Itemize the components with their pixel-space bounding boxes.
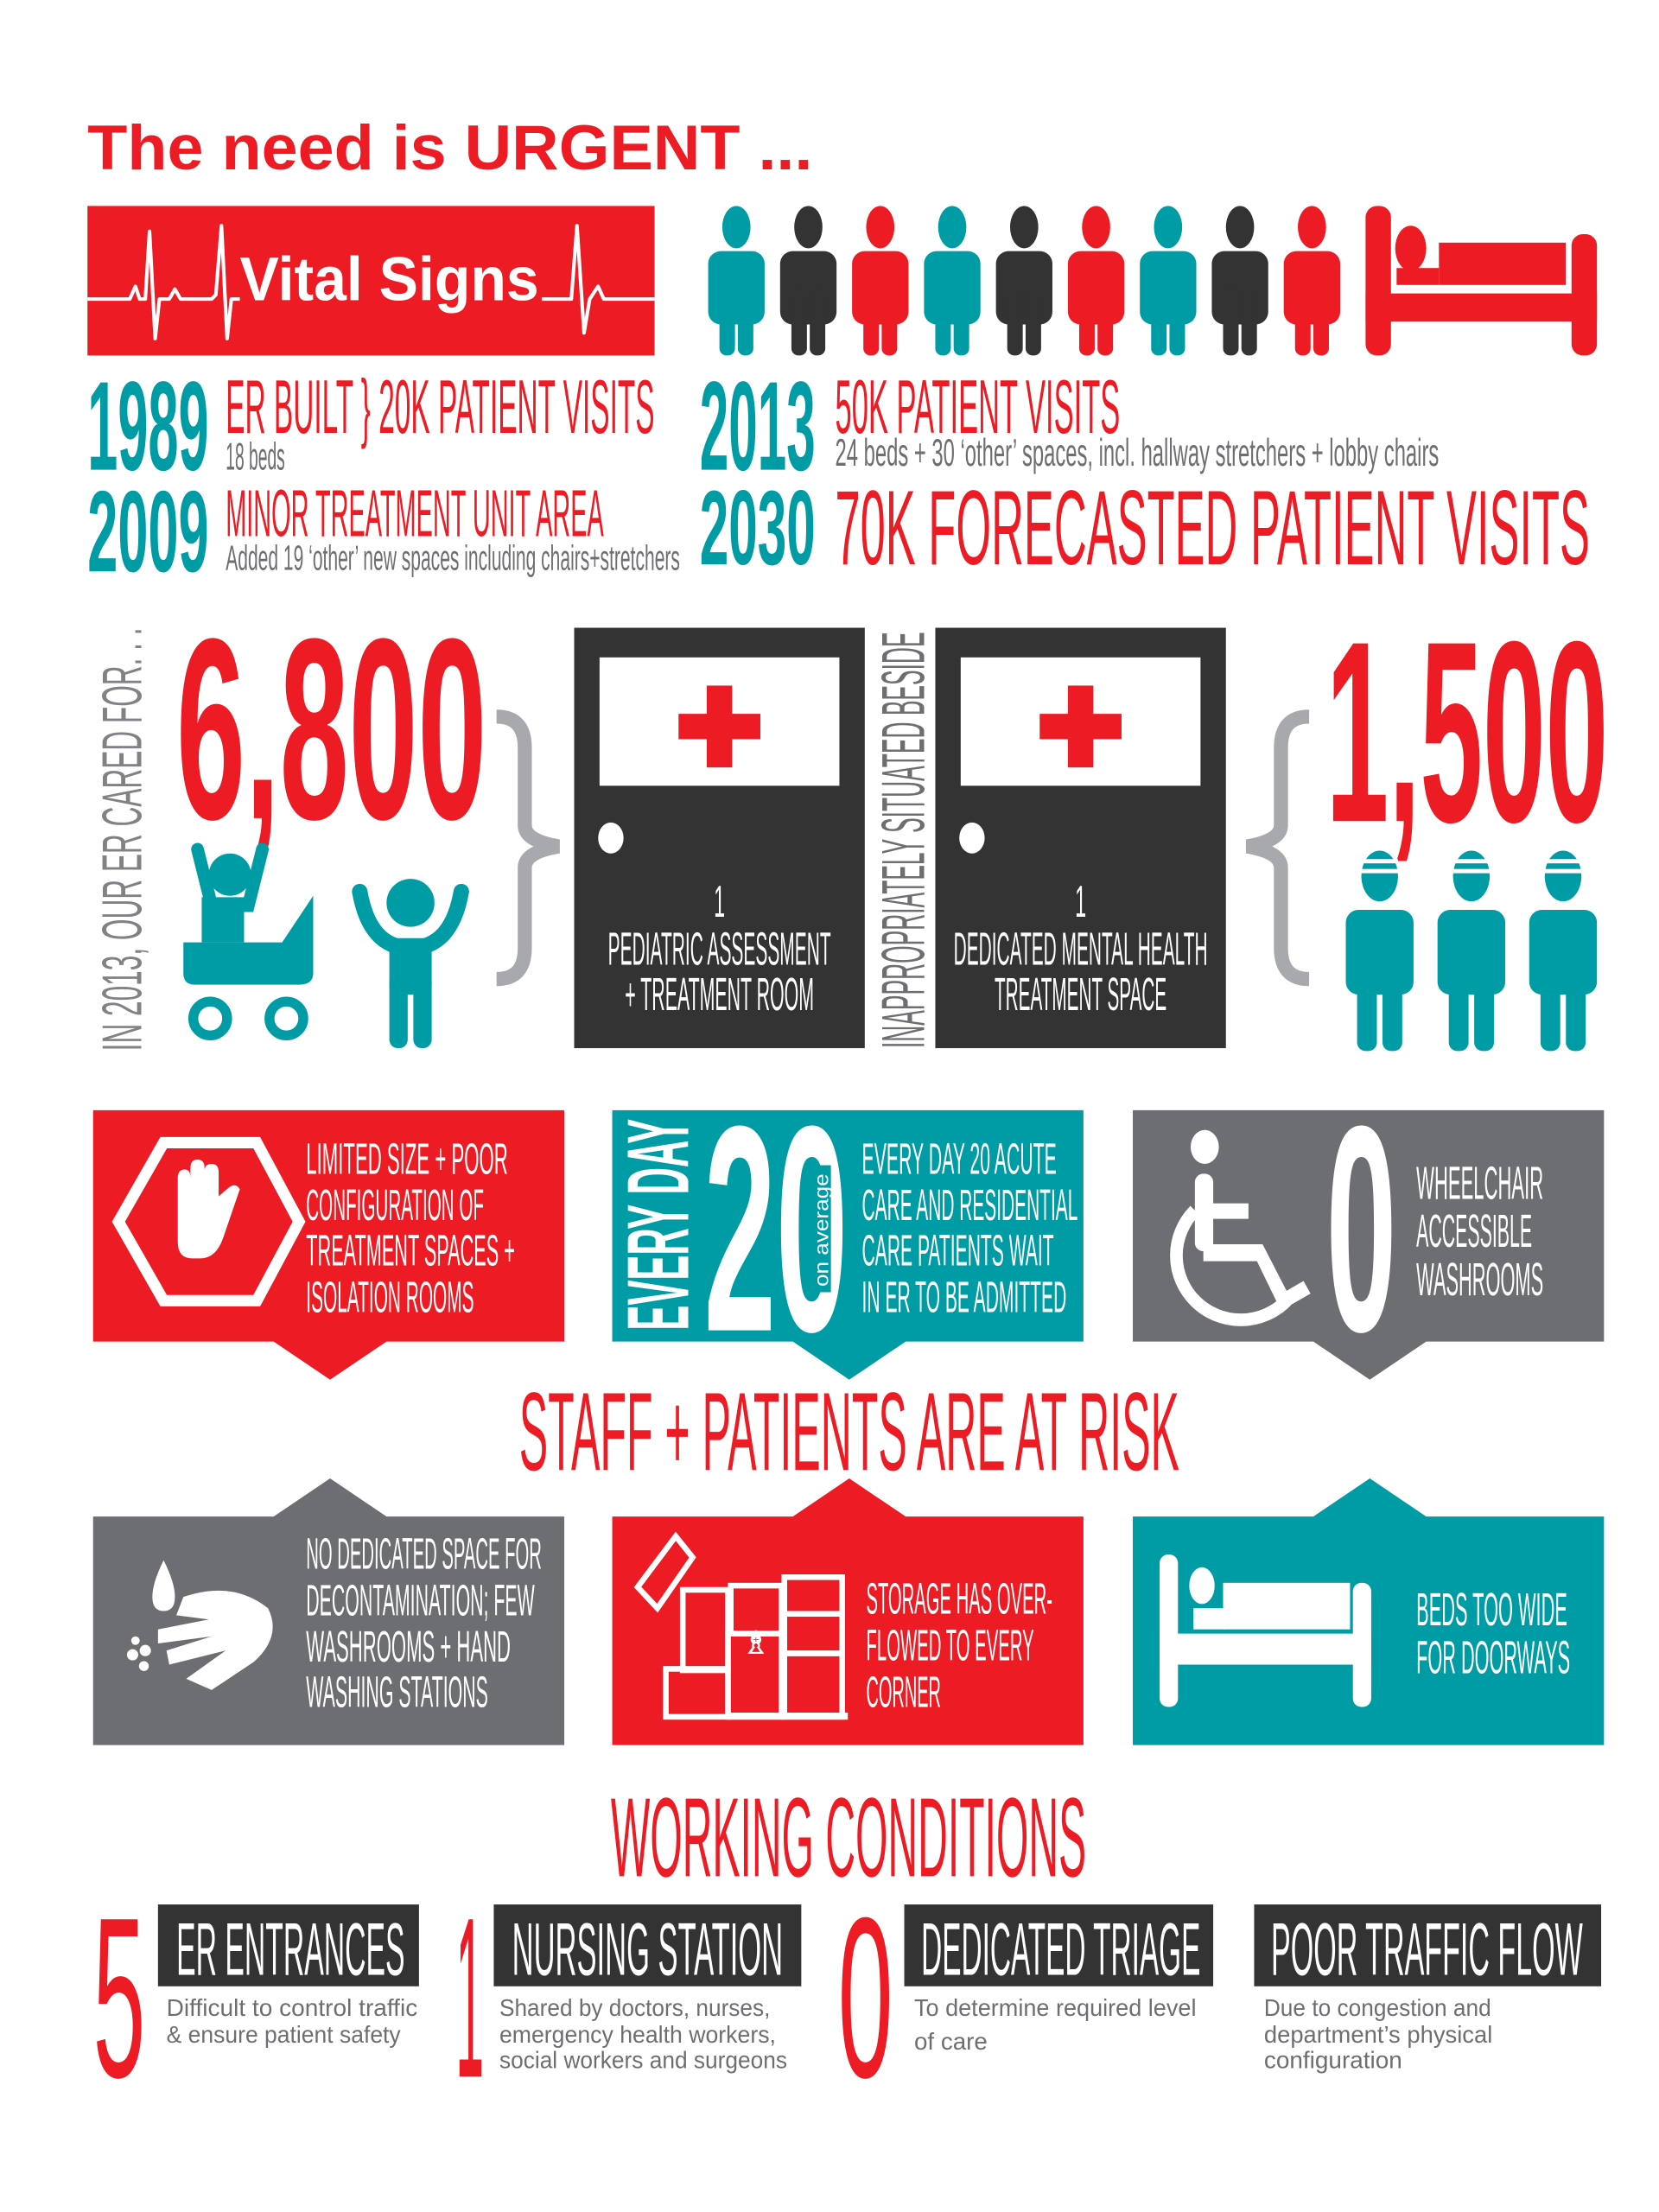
text: STORAGE HAS OVER- — [866, 1574, 1052, 1624]
text: IN 2013, OUR ER CARED FOR. . . — [90, 628, 153, 1051]
stat: poor traffic flow: configuration — [1264, 2046, 1402, 2073]
stat: 1 nursing station: emergency health workers, — [499, 2021, 776, 2048]
text: DEDICATED TRIAGE — [921, 1909, 1200, 1992]
icon: children — [183, 849, 461, 1048]
panel: every day 20: on average — [810, 1173, 832, 1287]
icon: hospital bed — [1365, 206, 1597, 355]
icon: wheelchair — [1176, 1130, 1311, 1320]
bracket: right — [1247, 716, 1309, 979]
panel: pediatric door: + TREATMENT ROOM — [625, 969, 814, 1020]
text: ER BUILT } 20K PATIENT VISITS — [226, 364, 655, 449]
stat: 5 er entrances: & ensure patient safety — [167, 2021, 401, 2048]
text block: 2013 — [700, 356, 1439, 498]
panel: storage: CORNER — [866, 1668, 941, 1717]
text: CARE PATIENTS WAIT — [862, 1225, 1054, 1274]
panel: limited size: LIMITED SIZE + POOR — [306, 1134, 508, 1183]
text block: 2009: 2009 — [87, 467, 209, 596]
icon row: patients — [709, 206, 1340, 355]
text block: 1989: 18 beds — [226, 436, 285, 479]
panel: pediatric door — [574, 628, 865, 1048]
stat: poor traffic flow — [1254, 1904, 1601, 2073]
panel: wheelchair washrooms: 0 — [1326, 1065, 1396, 1393]
stat: 0 dedicated triage: of care — [914, 2028, 988, 2055]
panel: beds too wide — [1133, 1478, 1604, 1745]
text block: 1989 — [87, 356, 655, 498]
panel: every day 20: 20 — [704, 1065, 848, 1393]
stat: 1 nursing station: Shared by doctors, nurses, — [499, 1994, 770, 2021]
text: NO DEDICATED SPACE FOR — [306, 1529, 542, 1579]
title: The need is URGENT ... — [87, 111, 812, 183]
panel: every day 20 — [610, 1065, 1084, 1393]
stat: 0 dedicated triage: To determine required level — [914, 1994, 1196, 2021]
panel: decontamination: WASHING STATIONS — [306, 1668, 488, 1717]
panel: pediatric door: 1 — [714, 877, 725, 927]
text: 6,800 — [176, 586, 486, 874]
stat: 0 dedicated triage — [838, 1871, 1213, 2126]
panel: vital signs banner — [87, 206, 655, 355]
icon: mental health patients — [1346, 850, 1597, 1051]
icon: red cross — [678, 685, 760, 767]
panel: decontamination — [93, 1478, 564, 1745]
stat: poor traffic flow: department’s physical — [1264, 2021, 1492, 2048]
stat: 0 dedicated triage: 0 — [838, 1871, 893, 2126]
stat: 5 er entrances: 5 — [93, 1871, 145, 2126]
panel: limited size: ISOLATION ROOMS — [306, 1272, 474, 1321]
stat: 5 er entrances — [93, 1871, 419, 2126]
text block: 2009: Added 19 ‘other’ new spaces including chairs+stretchers — [226, 538, 680, 578]
panel: limited size: CONFIGURATION OF — [306, 1180, 484, 1230]
text block: 2030: 2030 — [700, 468, 816, 587]
panel: limited size — [93, 1110, 564, 1380]
panel: every day 20: EVERY DAY — [610, 1119, 708, 1331]
icon: hand washing — [127, 1560, 273, 1690]
text: EVERY DAY 20 ACUTE — [862, 1134, 1057, 1183]
panel: mental health door: 1 — [1075, 877, 1086, 927]
text: MINOR TREATMENT UNIT AREA — [226, 477, 604, 550]
panel: mental health door — [935, 628, 1226, 1048]
bracket: left — [497, 716, 559, 979]
stat: 1 nursing station: social workers and surgeons — [499, 2046, 787, 2073]
panel: wheelchair washrooms — [1133, 1065, 1604, 1393]
panel: decontamination: WASHROOMS + HAND — [306, 1622, 511, 1671]
icon: red cross — [1039, 685, 1122, 767]
panel: limited size: TREATMENT SPACES + — [306, 1225, 515, 1274]
text: DECONTAMINATION; FEW — [306, 1575, 535, 1624]
text: IN ER TO BE ADMITTED — [862, 1272, 1066, 1321]
panel: storage — [613, 1478, 1084, 1745]
heading: vital signs: Vital Signs — [240, 245, 539, 315]
text: CARE AND RESIDENTIAL — [862, 1180, 1077, 1230]
stat: 1 nursing station — [455, 1871, 801, 2126]
text block: 2013: 50K PATIENT VISITS — [836, 364, 1120, 449]
icon: bed — [1160, 1554, 1371, 1707]
text block: 2009 — [87, 467, 680, 596]
text: PEDIATRIC ASSESSMENT — [608, 924, 831, 976]
stat: 1 nursing station: 1 — [455, 1871, 484, 2126]
text: NURSING STATION — [512, 1909, 783, 1992]
icon: overflowing boxes — [638, 1536, 845, 1717]
panel: mental health door: TREATMENT SPACE — [995, 969, 1166, 1020]
text block: 2013: 2013 — [700, 356, 816, 498]
panel: storage: FLOWED TO EVERY — [866, 1621, 1034, 1670]
text block: 1989: 1989 — [87, 356, 209, 498]
icon: stop hand — [118, 1142, 299, 1300]
panel: storage: ♗ — [742, 1624, 770, 1660]
stat: 5 er entrances: Difficult to control traffic — [167, 1994, 417, 2021]
text: DEDICATED MENTAL HEALTH — [954, 924, 1208, 976]
stat: poor traffic flow: Due to congestion and — [1264, 1994, 1491, 2021]
text: ER ENTRANCES — [176, 1909, 405, 1992]
